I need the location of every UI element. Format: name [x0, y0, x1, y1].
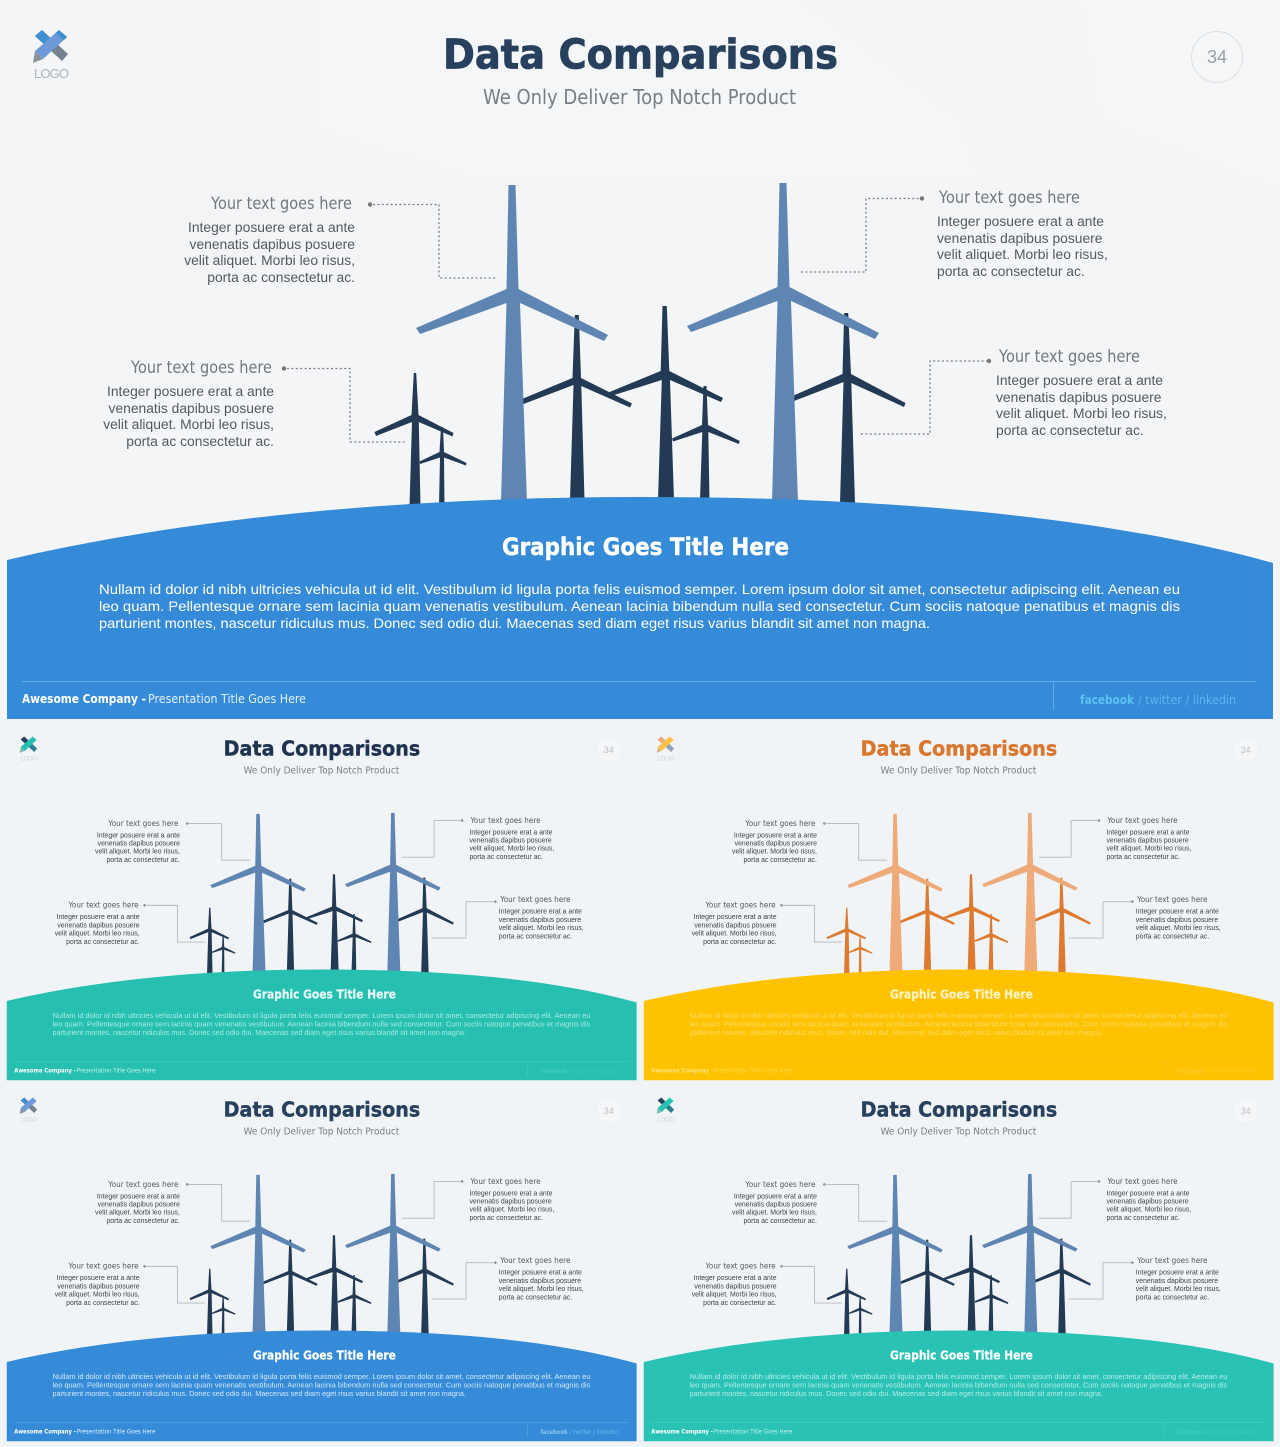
logo: [657, 1097, 675, 1123]
callout: lower right: venenatis dapibus posuere: [996, 389, 1162, 405]
callout: top right: Integer posuere erat a ante: [469, 829, 553, 836]
panel body text: Nullam id dolor id nibh ultricies vehicula ut id elit. Vestibulum id ligula porta felis euismod semper. Lorem ipsum dolor sit amet, consectetur adipiscing elit. Aenean eu: [99, 581, 1180, 597]
callout: top left: Your text goes here: [744, 818, 815, 828]
page number badge: [1233, 737, 1258, 763]
callout: lower right: venenatis dapibus posuere: [1136, 917, 1218, 924]
callout: top right: porta ac consectetur ac.: [1106, 854, 1180, 861]
slide: teal variant two: [644, 1097, 1274, 1441]
callout: lower left: Integer posuere erat a ante: [694, 1275, 777, 1282]
footer: Awesome Company -: [14, 1067, 76, 1074]
callout: top right: porta ac consectetur ac.: [937, 263, 1085, 279]
callout: top left: [95, 818, 250, 864]
callout: lower right: [432, 894, 584, 941]
callout: top right: velit aliquet. Morbi leo risus,: [469, 846, 554, 853]
callout: lower left: Your text goes here: [68, 1261, 139, 1271]
callout: top right: Your text goes here: [470, 1176, 541, 1186]
footer: facebook: [1178, 1429, 1205, 1436]
callout: top right: venenatis dapibus posuere: [937, 230, 1103, 246]
callout: lower right: Your text goes here: [1136, 1255, 1207, 1265]
panel body text: parturient montes, nascetur ridiculus mus. Donec sed odio dui. Maecenas sed diam eget risus varius blandit sit amet non magna.: [53, 1391, 466, 1398]
panel heading: Graphic Goes Title Here: [890, 987, 1033, 1001]
panel body text: leo quam. Pellentesque ornare sem lacinia quam venenatis vestibulum. Aenean lacinia bibendum nulla sed consectetur. Cum sociis natoque penatibus et magnis dis: [53, 1382, 591, 1389]
panel body text: parturient montes, nascetur ridiculus mus. Donec sed odio dui. Maecenas sed diam eget risus varius blandit sit amet non magna.: [53, 1030, 466, 1037]
callout: top left: Integer posuere erat a ante: [734, 832, 817, 839]
callout: top left: porta ac consectetur ac.: [207, 269, 355, 285]
footer: Presentation Title Goes Here: [77, 1428, 156, 1435]
footer: facebook: [1080, 693, 1135, 707]
footer: [14, 1062, 628, 1076]
page number badge: 34: [1241, 1106, 1251, 1116]
callout: lower right: porta ac consectetur ac.: [499, 934, 572, 941]
footer: Presentation Title Goes Here: [714, 1067, 793, 1074]
subtitle: We Only Deliver Top Notch Product: [881, 765, 1036, 776]
subtitle: We Only Deliver Top Notch Product: [244, 1126, 399, 1137]
wind turbines: dark: [827, 1235, 1091, 1335]
callout: top left: [184, 194, 496, 285]
panel body text: [690, 1013, 1228, 1037]
footer: [651, 1062, 1265, 1076]
callout: lower right: velit aliquet. Morbi leo risus,: [499, 925, 584, 932]
footer: / twitter / linkedin: [1206, 1429, 1255, 1436]
callout: lower left: venenatis dapibus posuere: [694, 923, 777, 930]
callout: top left: velit aliquet. Morbi leo risus,: [95, 1210, 180, 1217]
panel heading: Graphic Goes Title Here: [253, 987, 396, 1001]
hill panel: [644, 970, 1274, 1080]
logo: [657, 736, 675, 762]
wind turbines: large: [847, 813, 1078, 972]
callout: top right: velit aliquet. Morbi leo risus,: [1106, 1207, 1191, 1214]
slide: blue variant: [7, 1097, 637, 1441]
panel body text: leo quam. Pellentesque ornare sem lacinia quam venenatis vestibulum. Aenean lacinia bibendum nulla sed consectetur. Cum sociis natoque penatibus et magnis dis: [99, 598, 1180, 614]
hill panel: [7, 1331, 637, 1441]
callout: lower right: [1069, 1255, 1221, 1302]
panel heading: Graphic Goes Title Here: [253, 1348, 396, 1362]
wind turbines: large: [210, 1174, 441, 1333]
wind turbines: dark: [374, 306, 906, 506]
callout: lower left: venenatis dapibus posuere: [694, 1284, 777, 1291]
subtitle: We Only Deliver Top Notch Product: [483, 85, 796, 109]
subtitle: We Only Deliver Top Notch Product: [244, 765, 399, 776]
panel body text: [53, 1374, 591, 1398]
callout: top left: venenatis dapibus posuere: [735, 1202, 817, 1209]
footer: Awesome Company -: [22, 692, 146, 706]
wind turbines: dark: [827, 874, 1091, 974]
callout: top right: venenatis dapibus posuere: [469, 1199, 552, 1206]
callout: top left: [95, 1179, 250, 1225]
callout: lower left: Integer posuere erat a ante: [57, 1275, 140, 1282]
panel body text: leo quam. Pellentesque ornare sem lacinia quam venenatis vestibulum. Aenean lacinia bibendum nulla sed consectetur. Cum sociis natoque penatibus et magnis dis: [690, 1021, 1228, 1028]
callout: top right: porta ac consectetur ac.: [469, 1215, 543, 1222]
footer: / twitter / linkedin: [569, 1429, 618, 1436]
wind turbines: dark: [190, 1235, 454, 1335]
callout: lower left: [55, 1261, 205, 1307]
page number badge: 34: [1241, 745, 1251, 755]
logo: [20, 736, 38, 762]
callout: lower right: [1069, 894, 1221, 941]
callout: lower right: porta ac consectetur ac.: [1136, 1295, 1209, 1302]
callout: top left: Integer posuere erat a ante: [97, 1193, 180, 1200]
callout: top left: Integer posuere erat a ante: [734, 1193, 817, 1200]
footer: facebook: [541, 1068, 568, 1075]
callout: lower left: [692, 900, 842, 946]
callout: top right: venenatis dapibus posuere: [1106, 1199, 1189, 1206]
callout: lower left: porta ac consectetur ac.: [703, 1300, 777, 1307]
logo: [33, 30, 69, 81]
callout: top right: Your text goes here: [1107, 815, 1178, 825]
callout: top left: Integer posuere erat a ante: [97, 832, 180, 839]
footer: Awesome Company -: [651, 1428, 713, 1435]
slide: orange and yellow variant: [644, 736, 1274, 1080]
logo: LOGO: [20, 755, 38, 762]
callout: top left: velit aliquet. Morbi leo risus,: [732, 849, 817, 856]
callout: lower left: velit aliquet. Morbi leo risus,: [103, 416, 274, 432]
callout: lower right: [861, 347, 1167, 438]
callout: top left: Your text goes here: [107, 818, 178, 828]
panel body text: Nullam id dolor id nibh ultricies vehicula ut id elit. Vestibulum id ligula porta felis euismod semper. Lorem ipsum dolor sit amet, consectetur adipiscing elit. Aenean eu: [690, 1374, 1227, 1381]
logo: LOGO: [34, 66, 69, 81]
callout: lower right: porta ac consectetur ac.: [1136, 934, 1209, 941]
callout: lower right: venenatis dapibus posuere: [1136, 1278, 1218, 1285]
callout: top right: Integer posuere erat a ante: [1106, 1190, 1190, 1197]
callout: lower right: venenatis dapibus posuere: [499, 917, 581, 924]
footer: / twitter / linkedin: [1206, 1068, 1255, 1075]
panel body text: [99, 581, 1180, 631]
title: Data Comparisons: [861, 1098, 1057, 1122]
title: Data Comparisons: [224, 737, 420, 761]
callout: top left: venenatis dapibus posuere: [98, 1202, 180, 1209]
footer: Presentation Title Goes Here: [148, 692, 306, 706]
panel heading: Graphic Goes Title Here: [890, 1348, 1033, 1362]
callout: top left: porta ac consectetur ac.: [743, 1218, 817, 1225]
page number badge: [596, 1098, 621, 1124]
panel body text: parturient montes, nascetur ridiculus mus. Donec sed odio dui. Maecenas sed diam eget risus varius blandit sit amet non magna.: [690, 1391, 1103, 1398]
hill panel: [7, 497, 1273, 719]
callout: lower left: porta ac consectetur ac.: [126, 433, 274, 449]
page number badge: 34: [604, 1106, 614, 1116]
callout: lower right: Your text goes here: [1136, 894, 1207, 904]
logo: LOGO: [657, 755, 675, 762]
callout: top left: venenatis dapibus posuere: [735, 841, 817, 848]
callout: top right: [402, 815, 554, 861]
callout: lower right: porta ac consectetur ac.: [499, 1295, 572, 1302]
callout: top right: [801, 188, 1108, 279]
footer: Presentation Title Goes Here: [714, 1428, 793, 1435]
footer: [651, 1423, 1265, 1437]
page number badge: 34: [604, 745, 614, 755]
panel body text: leo quam. Pellentesque ornare sem lacinia quam venenatis vestibulum. Aenean lacinia bibendum nulla sed consectetur. Cum sociis natoque penatibus et magnis dis: [53, 1021, 591, 1028]
callout: top right: porta ac consectetur ac.: [469, 854, 543, 861]
callout: lower left: [103, 358, 405, 449]
page number badge: [1192, 32, 1242, 82]
callout: top left: [732, 1179, 887, 1225]
callout: lower left: velit aliquet. Morbi leo risus,: [692, 931, 777, 938]
slide: main blue: [7, 30, 1273, 719]
callout: lower right: velit aliquet. Morbi leo risus,: [1136, 1286, 1221, 1293]
page number badge: [596, 737, 621, 763]
hill panel: [7, 970, 637, 1080]
callout: lower right: Integer posuere erat a ante: [1136, 909, 1219, 916]
footer: Awesome Company -: [651, 1067, 713, 1074]
panel body text: [690, 1374, 1228, 1398]
callout: lower right: Your text goes here: [499, 1255, 570, 1265]
callout: top left: venenatis dapibus posuere: [98, 841, 180, 848]
callout: lower right: venenatis dapibus posuere: [499, 1278, 581, 1285]
callout: top right: porta ac consectetur ac.: [1106, 1215, 1180, 1222]
callout: lower right: porta ac consectetur ac.: [996, 422, 1144, 438]
callout: top left: velit aliquet. Morbi leo risus,: [184, 252, 355, 268]
footer: [14, 1423, 628, 1437]
callout: top left: porta ac consectetur ac.: [106, 857, 180, 864]
callout: top right: [1039, 1176, 1191, 1222]
subtitle: We Only Deliver Top Notch Product: [881, 1126, 1036, 1137]
footer: facebook: [1178, 1068, 1205, 1075]
callout: top left: Your text goes here: [107, 1179, 178, 1189]
slide: teal variant: [7, 736, 637, 1080]
callout: lower right: velit aliquet. Morbi leo risus,: [499, 1286, 584, 1293]
callout: top right: velit aliquet. Morbi leo risus,: [469, 1207, 554, 1214]
callout: top left: [732, 818, 887, 864]
wind turbines: large: [416, 183, 879, 502]
panel body text: Nullam id dolor id nibh ultricies vehicula ut id elit. Vestibulum id ligula porta felis euismod semper. Lorem ipsum dolor sit amet, consectetur adipiscing elit. Aenean eu: [53, 1374, 590, 1381]
hill panel: [644, 1331, 1274, 1441]
callout: lower right: velit aliquet. Morbi leo risus,: [996, 405, 1167, 421]
callout: lower left: porta ac consectetur ac.: [66, 939, 140, 946]
callout: lower right: velit aliquet. Morbi leo risus,: [1136, 925, 1221, 932]
title: Data Comparisons: [861, 737, 1057, 761]
callout: lower left: [692, 1261, 842, 1307]
callout: top right: Integer posuere erat a ante: [1106, 829, 1190, 836]
callout: top left: velit aliquet. Morbi leo risus,: [95, 849, 180, 856]
callout: lower left: Integer posuere erat a ante: [694, 914, 777, 921]
callout: top left: Integer posuere erat a ante: [188, 219, 355, 235]
callout: lower left: porta ac consectetur ac.: [703, 939, 777, 946]
title: Data Comparisons: [224, 1098, 420, 1122]
callout: lower right: Integer posuere erat a ante: [499, 909, 582, 916]
footer: / twitter / linkedin: [1138, 693, 1236, 707]
callout: top right: velit aliquet. Morbi leo risus,: [1106, 846, 1191, 853]
callout: top right: [402, 1176, 554, 1222]
footer: [22, 682, 1256, 710]
footer: / twitter / linkedin: [569, 1068, 618, 1075]
panel body text: parturient montes, nascetur ridiculus mus. Donec sed odio dui. Maecenas sed diam eget risus varius blandit sit amet non magna.: [690, 1030, 1103, 1037]
callout: lower left: [55, 900, 205, 946]
callout: lower left: Your text goes here: [68, 900, 139, 910]
callout: top right: Your text goes here: [1107, 1176, 1178, 1186]
callout: top right: venenatis dapibus posuere: [469, 838, 552, 845]
callout: lower left: Integer posuere erat a ante: [57, 914, 140, 921]
callout: lower right: Your text goes here: [499, 894, 570, 904]
callout: lower right: [432, 1255, 584, 1302]
callout: top right: Integer posuere erat a ante: [469, 1190, 553, 1197]
title: Data Comparisons: [443, 30, 838, 78]
callout: lower left: velit aliquet. Morbi leo risus,: [692, 1292, 777, 1299]
callout: top right: Your text goes here: [470, 815, 541, 825]
callout: lower left: venenatis dapibus posuere: [57, 1284, 140, 1291]
panel body text: [53, 1013, 591, 1037]
logo: LOGO: [657, 1116, 675, 1123]
logo: LOGO: [20, 1116, 38, 1123]
callout: top right: Integer posuere erat a ante: [937, 213, 1104, 229]
callout: top right: venenatis dapibus posuere: [1106, 838, 1189, 845]
page number badge: 34: [1207, 47, 1227, 67]
callout: top right: Your text goes here: [938, 188, 1080, 207]
panel heading: Graphic Goes Title Here: [502, 533, 789, 561]
callout: lower left: Your text goes here: [705, 900, 776, 910]
callout: top left: velit aliquet. Morbi leo risus,: [732, 1210, 817, 1217]
logo: [20, 1097, 38, 1123]
callout: lower right: Your text goes here: [998, 347, 1140, 366]
callout: lower left: venenatis dapibus posuere: [57, 923, 140, 930]
panel body text: leo quam. Pellentesque ornare sem lacinia quam venenatis vestibulum. Aenean lacinia bibendum nulla sed consectetur. Cum sociis natoque penatibus et magnis dis: [690, 1382, 1228, 1389]
panel body text: Nullam id dolor id nibh ultricies vehicula ut id elit. Vestibulum id ligula porta felis euismod semper. Lorem ipsum dolor sit amet, consectetur adipiscing elit. Aenean eu: [690, 1013, 1227, 1020]
callout: lower left: velit aliquet. Morbi leo risus,: [55, 1292, 140, 1299]
wind turbines: large: [847, 1174, 1078, 1333]
wind turbines: large: [210, 813, 441, 972]
callout: lower right: Integer posuere erat a ante: [499, 1270, 582, 1277]
footer: Presentation Title Goes Here: [77, 1067, 156, 1074]
panel body text: parturient montes, nascetur ridiculus mus. Donec sed odio dui. Maecenas sed diam eget risus varius blandit sit amet non magna.: [99, 615, 930, 631]
callout: lower left: porta ac consectetur ac.: [66, 1300, 140, 1307]
callout: lower right: Integer posuere erat a ante: [1136, 1270, 1219, 1277]
callout: lower left: velit aliquet. Morbi leo risus,: [55, 931, 140, 938]
callout: top right: [1039, 815, 1191, 861]
callout: top right: velit aliquet. Morbi leo risus,: [937, 246, 1108, 262]
panel body text: Nullam id dolor id nibh ultricies vehicula ut id elit. Vestibulum id ligula porta felis euismod semper. Lorem ipsum dolor sit amet, consectetur adipiscing elit. Aenean eu: [53, 1013, 590, 1020]
footer: Awesome Company -: [14, 1428, 76, 1435]
callout: top left: porta ac consectetur ac.: [106, 1218, 180, 1225]
callout: lower left: Your text goes here: [705, 1261, 776, 1271]
callout: top left: Your text goes here: [744, 1179, 815, 1189]
callout: top left: Your text goes here: [210, 194, 352, 213]
footer: facebook: [541, 1429, 568, 1436]
callout: top left: porta ac consectetur ac.: [743, 857, 817, 864]
page number badge: [1233, 1098, 1258, 1124]
callout: lower right: Integer posuere erat a ante: [996, 372, 1163, 388]
callout: lower left: Your text goes here: [130, 358, 272, 377]
callout: lower left: Integer posuere erat a ante: [107, 383, 274, 399]
callout: lower left: venenatis dapibus posuere: [109, 400, 274, 416]
callout: top left: venenatis dapibus posuere: [190, 236, 355, 252]
wind turbines: dark: [190, 874, 454, 974]
